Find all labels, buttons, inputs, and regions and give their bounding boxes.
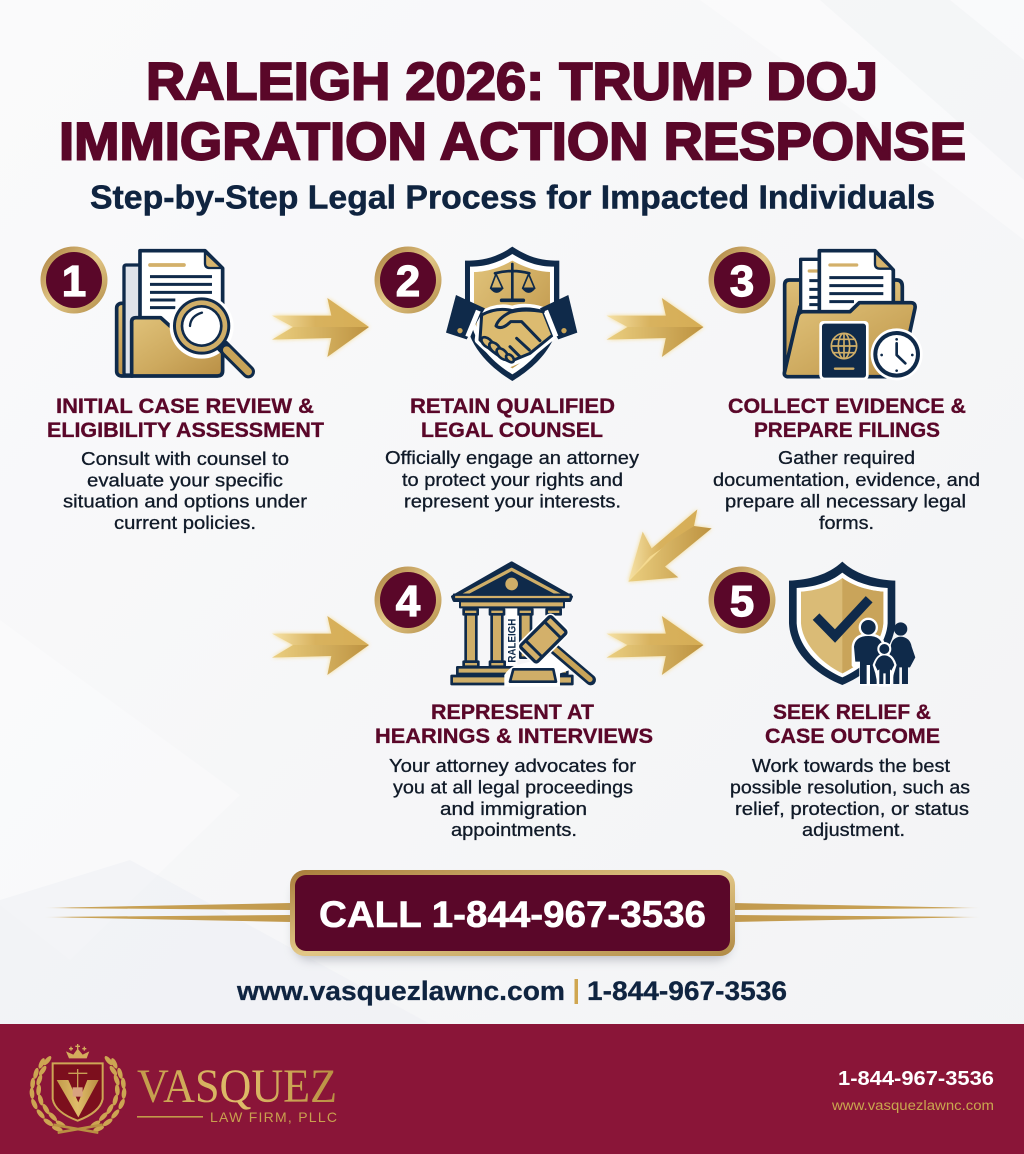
heading: PREPARE FILINGS (754, 418, 940, 442)
logo: crest (29, 1044, 127, 1133)
text block: Officially engage an attorney (385, 448, 639, 468)
panel: step 4 (374, 563, 653, 840)
contact line (236, 976, 787, 1006)
badge: number 4 (374, 566, 442, 634)
courthouse banner text: RALEIGH (507, 619, 519, 663)
logo: wordmark: VASQUEZ (137, 1060, 337, 1113)
icon: shield with handshake and scales (446, 247, 577, 381)
footer website: www.vasquezlawnc.com (831, 1098, 994, 1113)
heading: HEARINGS & INTERVIEWS (375, 724, 653, 748)
text block: current policies. (114, 513, 256, 533)
badge: number 2: 2 (396, 257, 420, 306)
badge: number 5: 5 (730, 577, 754, 626)
text block (730, 756, 970, 840)
badge: number 3: 3 (730, 257, 754, 306)
heading: COLLECT EVIDENCE & (728, 394, 966, 418)
footer phone: 1-844-967-3536 (838, 1068, 994, 1090)
icon: shield with check and family (789, 562, 915, 687)
text block: Gather required (778, 448, 915, 468)
call to action banner: CALL 1-844-967-3536 (319, 894, 706, 935)
title: IMMIGRATION ACTION RESPONSE (59, 112, 966, 172)
heading: RETAIN QUALIFIED (410, 394, 615, 418)
heading (410, 394, 615, 442)
badge: number 3 (708, 246, 776, 314)
icon: courthouse with gavel (452, 563, 591, 687)
badge: number 5 (708, 566, 776, 634)
text block: prepare all necessary legal (725, 492, 966, 512)
text block: represent your interests. (404, 492, 621, 512)
heading (728, 394, 966, 442)
text block: possible resolution, such as (730, 778, 970, 798)
title: RALEIGH 2026: TRUMP DOJ (146, 52, 878, 112)
heading (765, 700, 940, 748)
arrow: step 1 to 2 (272, 298, 369, 357)
text block: forms. (819, 513, 874, 533)
heading: INITIAL CASE REVIEW & (56, 394, 314, 418)
heading: LEGAL COUNSEL (421, 418, 603, 442)
panel: step 5 (708, 562, 970, 840)
arrow: step 2 to 3 (606, 298, 703, 357)
heading: CASE OUTCOME (765, 724, 940, 748)
contact line: 1-844-967-3536 (587, 976, 787, 1006)
badge: number 1: 1 (62, 257, 86, 306)
heading (375, 700, 653, 748)
text block: situation and options under (63, 492, 307, 512)
text block (63, 449, 307, 533)
heading (47, 394, 324, 442)
text block: documentation, evidence, and (713, 470, 980, 490)
arrow: entry to step 4 (272, 616, 369, 675)
text block: you at all legal proceedings (393, 778, 633, 798)
text block: Work towards the best (752, 756, 950, 776)
contact line: www.vasquezlawnc.com (236, 976, 565, 1006)
icon: folder with passport and clock (784, 251, 923, 380)
call to action banner (42, 870, 982, 960)
text block: appointments. (451, 820, 577, 840)
text block: Consult with counsel to (81, 449, 289, 469)
badge: number 4: 4 (396, 577, 421, 626)
panel: step 3 (708, 246, 980, 533)
text block: evaluate your specific (87, 470, 283, 490)
panel: step 1 (40, 246, 324, 533)
heading: REPRESENT AT (431, 700, 594, 724)
footer band: LAW FIRM, PLLC (210, 1109, 337, 1125)
text block: adjustment. (802, 820, 905, 840)
text block: to protect your rights and (402, 470, 623, 490)
panel: step 2 (374, 246, 639, 512)
heading: ELIGIBILITY ASSESSMENT (47, 418, 324, 442)
arrow: step 3 to 4 diagonal (628, 509, 712, 582)
heading: SEEK RELIEF & (773, 700, 931, 724)
footer band (0, 1024, 1024, 1154)
text block (389, 756, 636, 840)
text block: relief, protection, or status (735, 799, 969, 819)
text block: and immigration (440, 799, 587, 819)
arrow: step 4 to 5 (606, 616, 703, 675)
subtitle: Step-by-Step Legal Process for Impacted Individuals (90, 178, 935, 216)
text block (385, 448, 639, 512)
text block (713, 448, 980, 533)
text block: Your attorney advocates for (389, 756, 636, 776)
title (59, 52, 966, 172)
badge: number 1 (40, 246, 108, 314)
badge: number 2 (374, 246, 442, 314)
icon: folder with magnifier (117, 251, 248, 376)
